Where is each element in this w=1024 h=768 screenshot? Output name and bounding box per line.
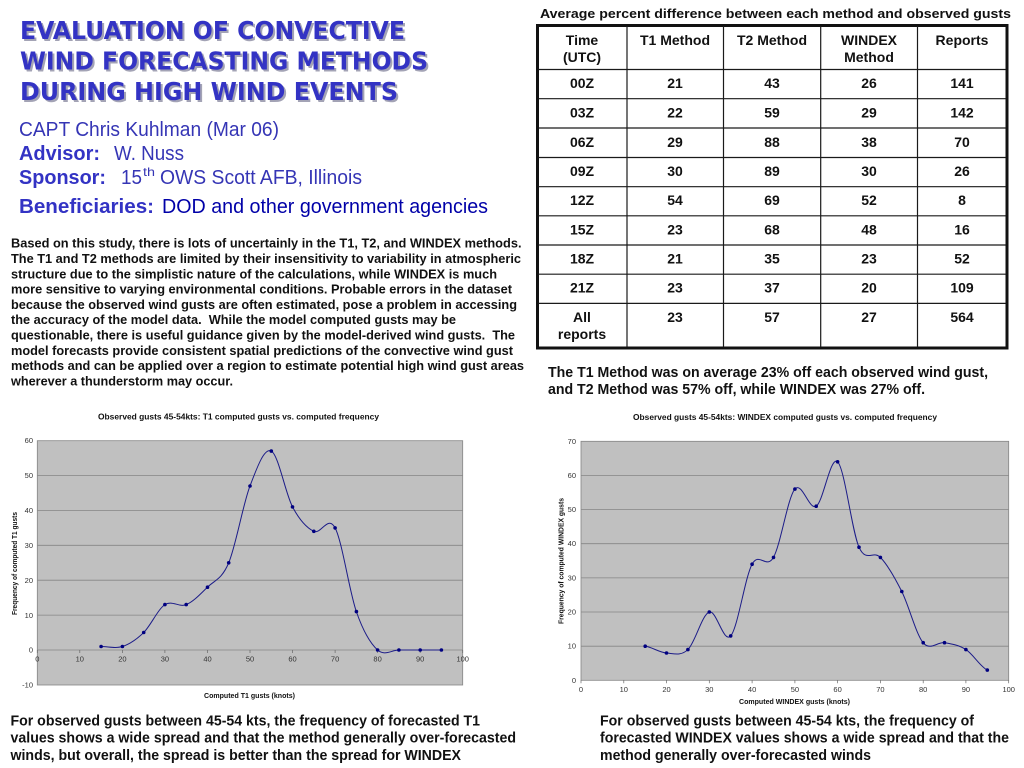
summary paragraph: model forecasts provide consistent spatial predictions of the convective wind gust bbox=[11, 343, 514, 358]
table data rows: 54 bbox=[667, 192, 683, 208]
table data rows: 23 bbox=[667, 280, 683, 296]
x axis labels bbox=[579, 685, 1015, 694]
table data rows: 03Z bbox=[570, 104, 595, 120]
x axis labels: 50 bbox=[791, 685, 799, 694]
table data rows: 30 bbox=[667, 163, 683, 179]
author and sponsor block: Sponsor: bbox=[19, 166, 106, 189]
table takeaway text: The T1 Method was on average 23% off each observed wind gust, bbox=[548, 365, 988, 381]
table data rows: 21 bbox=[667, 75, 683, 91]
table data rows: 00Z bbox=[570, 75, 595, 91]
table header row: (UTC) bbox=[563, 49, 601, 65]
caption: WINDEX chart bbox=[600, 713, 1009, 764]
title: DURING HIGH WIND EVENTS bbox=[22, 79, 400, 108]
table data rows: 06Z bbox=[570, 134, 595, 150]
author and sponsor block: OWS Scott AFB, Illinois bbox=[160, 166, 362, 189]
x axis labels bbox=[35, 654, 469, 664]
table data rows: 38 bbox=[861, 134, 877, 150]
summary paragraph: methods and can be applied over a region to estimate potential high wind gust areas bbox=[11, 358, 524, 373]
table data rows: 69 bbox=[764, 192, 780, 208]
y axis labels: 30 bbox=[25, 541, 33, 550]
y axis labels: 40 bbox=[568, 539, 576, 548]
plot area bbox=[37, 441, 463, 685]
data markers bbox=[99, 449, 443, 652]
table data rows: 18Z bbox=[570, 250, 595, 266]
table data rows: 23 bbox=[667, 222, 683, 238]
caption: T1 chart: values shows a wide spread and that the method generally over-forecasted bbox=[10, 730, 516, 747]
y axis labels: 30 bbox=[568, 574, 576, 582]
table data rows: 15Z bbox=[570, 222, 595, 238]
summary paragraph: wherever a thunderstorm may occur. bbox=[10, 374, 233, 388]
y axis labels: 40 bbox=[25, 506, 33, 515]
table data rows: 20 bbox=[861, 280, 877, 296]
x axis labels: 100 bbox=[1002, 685, 1015, 694]
y axis labels: 10 bbox=[25, 611, 33, 620]
table header row bbox=[563, 32, 989, 65]
table data rows: 09Z bbox=[570, 163, 595, 179]
x axis title: Computed T1 gusts (knots) bbox=[204, 691, 296, 700]
author and sponsor block bbox=[19, 118, 362, 189]
table data rows: 23 bbox=[861, 250, 877, 266]
table data rows: 23 bbox=[667, 309, 683, 325]
y axis labels: 50 bbox=[568, 505, 576, 514]
table data rows: 59 bbox=[764, 104, 780, 120]
y axis labels: 20 bbox=[25, 576, 33, 585]
caption: WINDEX chart: forecasted WINDEX values shows a wide spread and that the bbox=[600, 730, 1009, 747]
table data rows: 8 bbox=[958, 192, 966, 208]
x axis labels: 30 bbox=[161, 654, 169, 664]
y axis labels: 60 bbox=[568, 471, 576, 480]
caption: T1 chart: For observed gusts between 45-54 kts, the frequency of forecasted T1 bbox=[10, 713, 480, 730]
table data rows: 52 bbox=[861, 192, 877, 208]
table data rows: 26 bbox=[861, 75, 877, 91]
table takeaway text bbox=[548, 365, 988, 398]
x axis labels: 0 bbox=[35, 654, 39, 664]
summary paragraph: structure due to the simplistic nature of the calculations, while WINDEX is much bbox=[11, 266, 497, 281]
table header row: Time bbox=[566, 32, 598, 48]
table data rows: reports bbox=[558, 326, 606, 342]
table data rows: 16 bbox=[954, 222, 970, 238]
author and sponsor block: CAPT Chris Kuhlman (Mar 06) bbox=[19, 118, 279, 141]
table data rows: 70 bbox=[954, 134, 970, 150]
chart: T1 computed gusts vs frequency bbox=[10, 412, 469, 700]
y axis title: Frequency of computed WINDEX gusts bbox=[556, 498, 566, 624]
table header row: WINDEX bbox=[841, 32, 898, 48]
table data rows: 141 bbox=[950, 75, 974, 91]
summary paragraph: more sensitive to varying environmental conditions. Probable errors in the dataset bbox=[11, 282, 513, 297]
table header row: Reports bbox=[936, 32, 989, 48]
author and sponsor block: Advisor: bbox=[19, 142, 100, 165]
y axis labels bbox=[568, 437, 576, 685]
table data rows: 43 bbox=[764, 75, 780, 91]
table data rows bbox=[558, 75, 974, 342]
table data rows: 564 bbox=[950, 309, 974, 325]
y axis labels: 60 bbox=[25, 436, 33, 445]
table data rows: 109 bbox=[950, 280, 974, 296]
author and sponsor block: th bbox=[143, 165, 155, 179]
table data rows: 21 bbox=[667, 250, 683, 266]
table data rows: 26 bbox=[954, 163, 970, 179]
table header row: T2 Method bbox=[737, 32, 807, 48]
x axis labels: 80 bbox=[919, 685, 927, 694]
x axis labels: 0 bbox=[579, 685, 583, 694]
summary paragraph: The T1 and T2 methods are limited by their insensitivity to variability in atmospheric bbox=[11, 251, 521, 266]
chart title: Observed gusts 45-54kts: WINDEX computed gusts vs. computed frequency bbox=[633, 413, 938, 422]
caption: T1 chart bbox=[10, 713, 516, 764]
x axis labels: 30 bbox=[705, 685, 713, 694]
x axis labels: 80 bbox=[373, 654, 382, 664]
table data rows: 21Z bbox=[570, 280, 595, 296]
x axis labels: 20 bbox=[662, 685, 671, 694]
table data rows: All bbox=[573, 309, 591, 325]
caption: WINDEX chart: For observed gusts between 45-54 kts, the frequency of bbox=[600, 713, 975, 730]
table data rows: 52 bbox=[954, 250, 970, 266]
table data rows: 29 bbox=[861, 104, 877, 120]
table takeaway text: and T2 Method was 57% off, while WINDEX was 27% off. bbox=[548, 382, 925, 398]
y axis labels: 10 bbox=[568, 642, 576, 651]
table data rows: 12Z bbox=[570, 192, 595, 208]
table heading: Average percent difference between each method and observed gusts bbox=[540, 6, 1011, 21]
summary paragraph: questionable, there is useful guidance given by the model-derived wind gusts. The bbox=[11, 328, 515, 342]
table data rows: 37 bbox=[764, 280, 780, 296]
table data rows: 29 bbox=[667, 134, 683, 150]
title: WIND FORECASTING METHODS bbox=[20, 46, 428, 76]
x axis labels: 70 bbox=[331, 654, 339, 664]
x axis labels: 50 bbox=[246, 654, 254, 664]
table header row: Method bbox=[844, 49, 894, 65]
x axis labels: 90 bbox=[416, 654, 424, 664]
table data rows: 88 bbox=[764, 134, 780, 150]
table data rows: 30 bbox=[861, 163, 877, 179]
beneficiaries line: Beneficiaries: bbox=[19, 195, 154, 218]
y axis labels: -10 bbox=[22, 680, 33, 690]
title bbox=[20, 16, 430, 108]
x axis labels: 20 bbox=[118, 654, 127, 664]
table data rows: 48 bbox=[861, 222, 877, 238]
beneficiaries line bbox=[19, 195, 488, 218]
data markers bbox=[643, 460, 989, 672]
chart title: Observed gusts 45-54kts: T1 computed gusts vs. computed frequency bbox=[98, 412, 380, 422]
title: EVALUATION OF CONVECTIVE bbox=[20, 16, 405, 45]
title: WIND FORECASTING METHODS bbox=[22, 48, 430, 78]
summary paragraph bbox=[10, 236, 524, 388]
table data rows: 22 bbox=[667, 104, 683, 120]
table header row: T1 Method bbox=[640, 32, 710, 48]
x axis labels: 40 bbox=[203, 654, 212, 664]
x axis title: Computed WINDEX gusts (knots) bbox=[739, 697, 851, 706]
y axis labels: 0 bbox=[29, 646, 33, 654]
author and sponsor block: W. Nuss bbox=[114, 142, 184, 165]
summary paragraph: Based on this study, there is lots of uncertainly in the T1, T2, and WINDEX methods. bbox=[11, 236, 522, 251]
table data rows: 68 bbox=[764, 222, 780, 238]
caption: T1 chart: winds, but overall, the spread is better than the spread for WINDEX bbox=[10, 747, 461, 764]
x axis labels: 60 bbox=[288, 654, 297, 664]
results table bbox=[538, 26, 1007, 348]
summary paragraph: the accuracy of the model data. While the model computed gusts may be bbox=[11, 312, 456, 327]
table data rows: 57 bbox=[764, 309, 780, 325]
y axis labels: 70 bbox=[568, 437, 576, 446]
table data rows: 142 bbox=[950, 104, 974, 120]
y axis labels: 20 bbox=[568, 608, 576, 616]
table data rows: 89 bbox=[764, 163, 780, 179]
title: DURING HIGH WIND EVENTS bbox=[20, 77, 398, 106]
y axis labels bbox=[22, 436, 33, 690]
beneficiaries line: DOD and other government agencies bbox=[162, 195, 488, 218]
x axis labels: 40 bbox=[748, 685, 756, 694]
table data rows: 27 bbox=[861, 309, 877, 325]
x axis labels: 90 bbox=[962, 685, 970, 694]
x axis labels: 70 bbox=[876, 685, 885, 694]
author and sponsor block: 15 bbox=[121, 166, 142, 189]
x axis labels: 10 bbox=[76, 654, 84, 664]
y axis title: Frequency of computed T1 gusts bbox=[10, 512, 19, 615]
caption: WINDEX chart: method generally over-forecasted winds bbox=[600, 747, 871, 764]
x axis labels: 10 bbox=[620, 685, 628, 694]
x axis labels: 60 bbox=[833, 685, 842, 694]
smoothed data line bbox=[645, 461, 987, 670]
y axis labels: 50 bbox=[25, 471, 33, 480]
title: EVALUATION OF CONVECTIVE bbox=[22, 18, 407, 47]
x axis labels: 100 bbox=[456, 654, 469, 664]
chart: WINDEX computed gusts vs frequency bbox=[556, 413, 1015, 706]
smoothed data line bbox=[101, 451, 441, 653]
table data rows: 35 bbox=[764, 250, 780, 266]
y axis labels: 0 bbox=[572, 676, 576, 685]
plot area bbox=[581, 441, 1009, 680]
summary paragraph: because the observed wind gusts are often estimated, pose a problem in accessing bbox=[11, 297, 517, 312]
